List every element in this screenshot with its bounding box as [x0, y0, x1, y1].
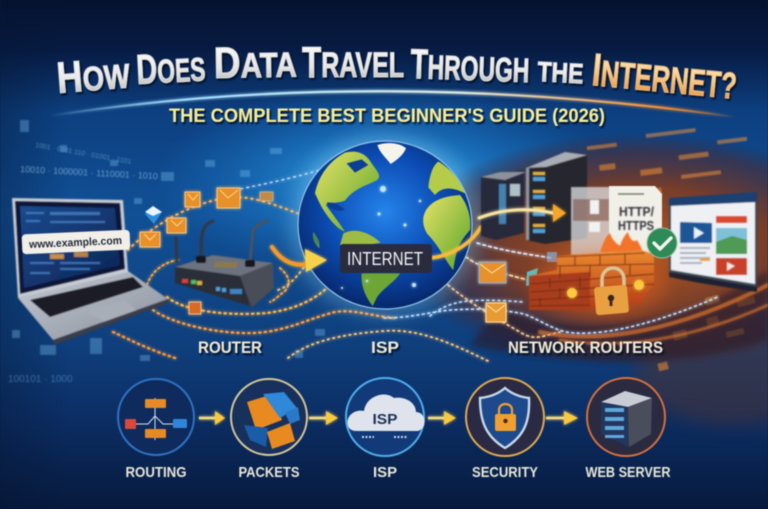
background data streams: 100101 · 1000	[8, 374, 73, 385]
globe light points	[341, 186, 421, 289]
HTTP document: HTTP/	[619, 204, 654, 219]
step: ISP: ISP	[372, 411, 398, 428]
continents	[313, 143, 470, 306]
laptop	[12, 198, 169, 345]
background data streams: 1001 · 0101 110 · 01001 · 1101	[35, 142, 132, 166]
step: packets	[231, 379, 307, 481]
title	[55, 38, 739, 109]
subtitle: THE COMPLETE BEST BEGINNER'S GUIDE (2026)	[169, 106, 605, 127]
step: security: SECURITY	[472, 464, 538, 481]
HTTP document	[609, 186, 662, 255]
HTTP document: HTTPS	[618, 218, 654, 233]
title: THROUGH	[410, 40, 530, 91]
packets	[140, 188, 557, 322]
title: THE	[537, 56, 584, 89]
title: TRAVEL	[302, 38, 404, 87]
router	[175, 221, 274, 307]
step arrow	[309, 411, 338, 425]
dark road band	[470, 270, 768, 361]
flames	[600, 232, 643, 253]
title: HOW	[55, 48, 132, 103]
check badge	[647, 228, 677, 258]
servers	[481, 152, 587, 244]
document panel	[571, 187, 611, 255]
globe	[290, 134, 480, 316]
arrow to server	[479, 204, 566, 222]
internet label: INTERNET	[347, 249, 423, 269]
step: ISP: ISP	[373, 464, 397, 481]
background data streams: 10010 · 1000001 · 1110001 · 1010	[20, 164, 158, 181]
padlock	[594, 268, 629, 315]
internet arrows	[272, 227, 481, 272]
label: router: ROUTER	[198, 338, 262, 357]
label: network routers: NETWORK ROUTERS	[508, 338, 663, 357]
step: web server: WEB SERVER	[586, 464, 671, 481]
step: ISP	[346, 378, 425, 481]
firewall	[529, 232, 666, 317]
step arrow	[199, 411, 225, 425]
step: security	[466, 378, 544, 481]
step: routing	[118, 379, 194, 481]
label: ISP: ISP	[371, 338, 399, 357]
title arc	[49, 91, 735, 117]
step arrow	[546, 411, 578, 425]
background data streams	[8, 120, 766, 413]
title: DOES	[135, 42, 206, 93]
data paths	[113, 170, 768, 362]
browser window	[669, 192, 757, 292]
step arrow	[428, 411, 456, 425]
URL bar	[22, 230, 130, 254]
internet label	[340, 244, 432, 273]
step: packets: PACKETS	[238, 464, 300, 481]
title: DATA	[213, 38, 297, 88]
URL bar: www.example.com	[28, 235, 122, 251]
step: web server	[586, 378, 671, 481]
step: routing: ROUTING	[126, 464, 186, 481]
